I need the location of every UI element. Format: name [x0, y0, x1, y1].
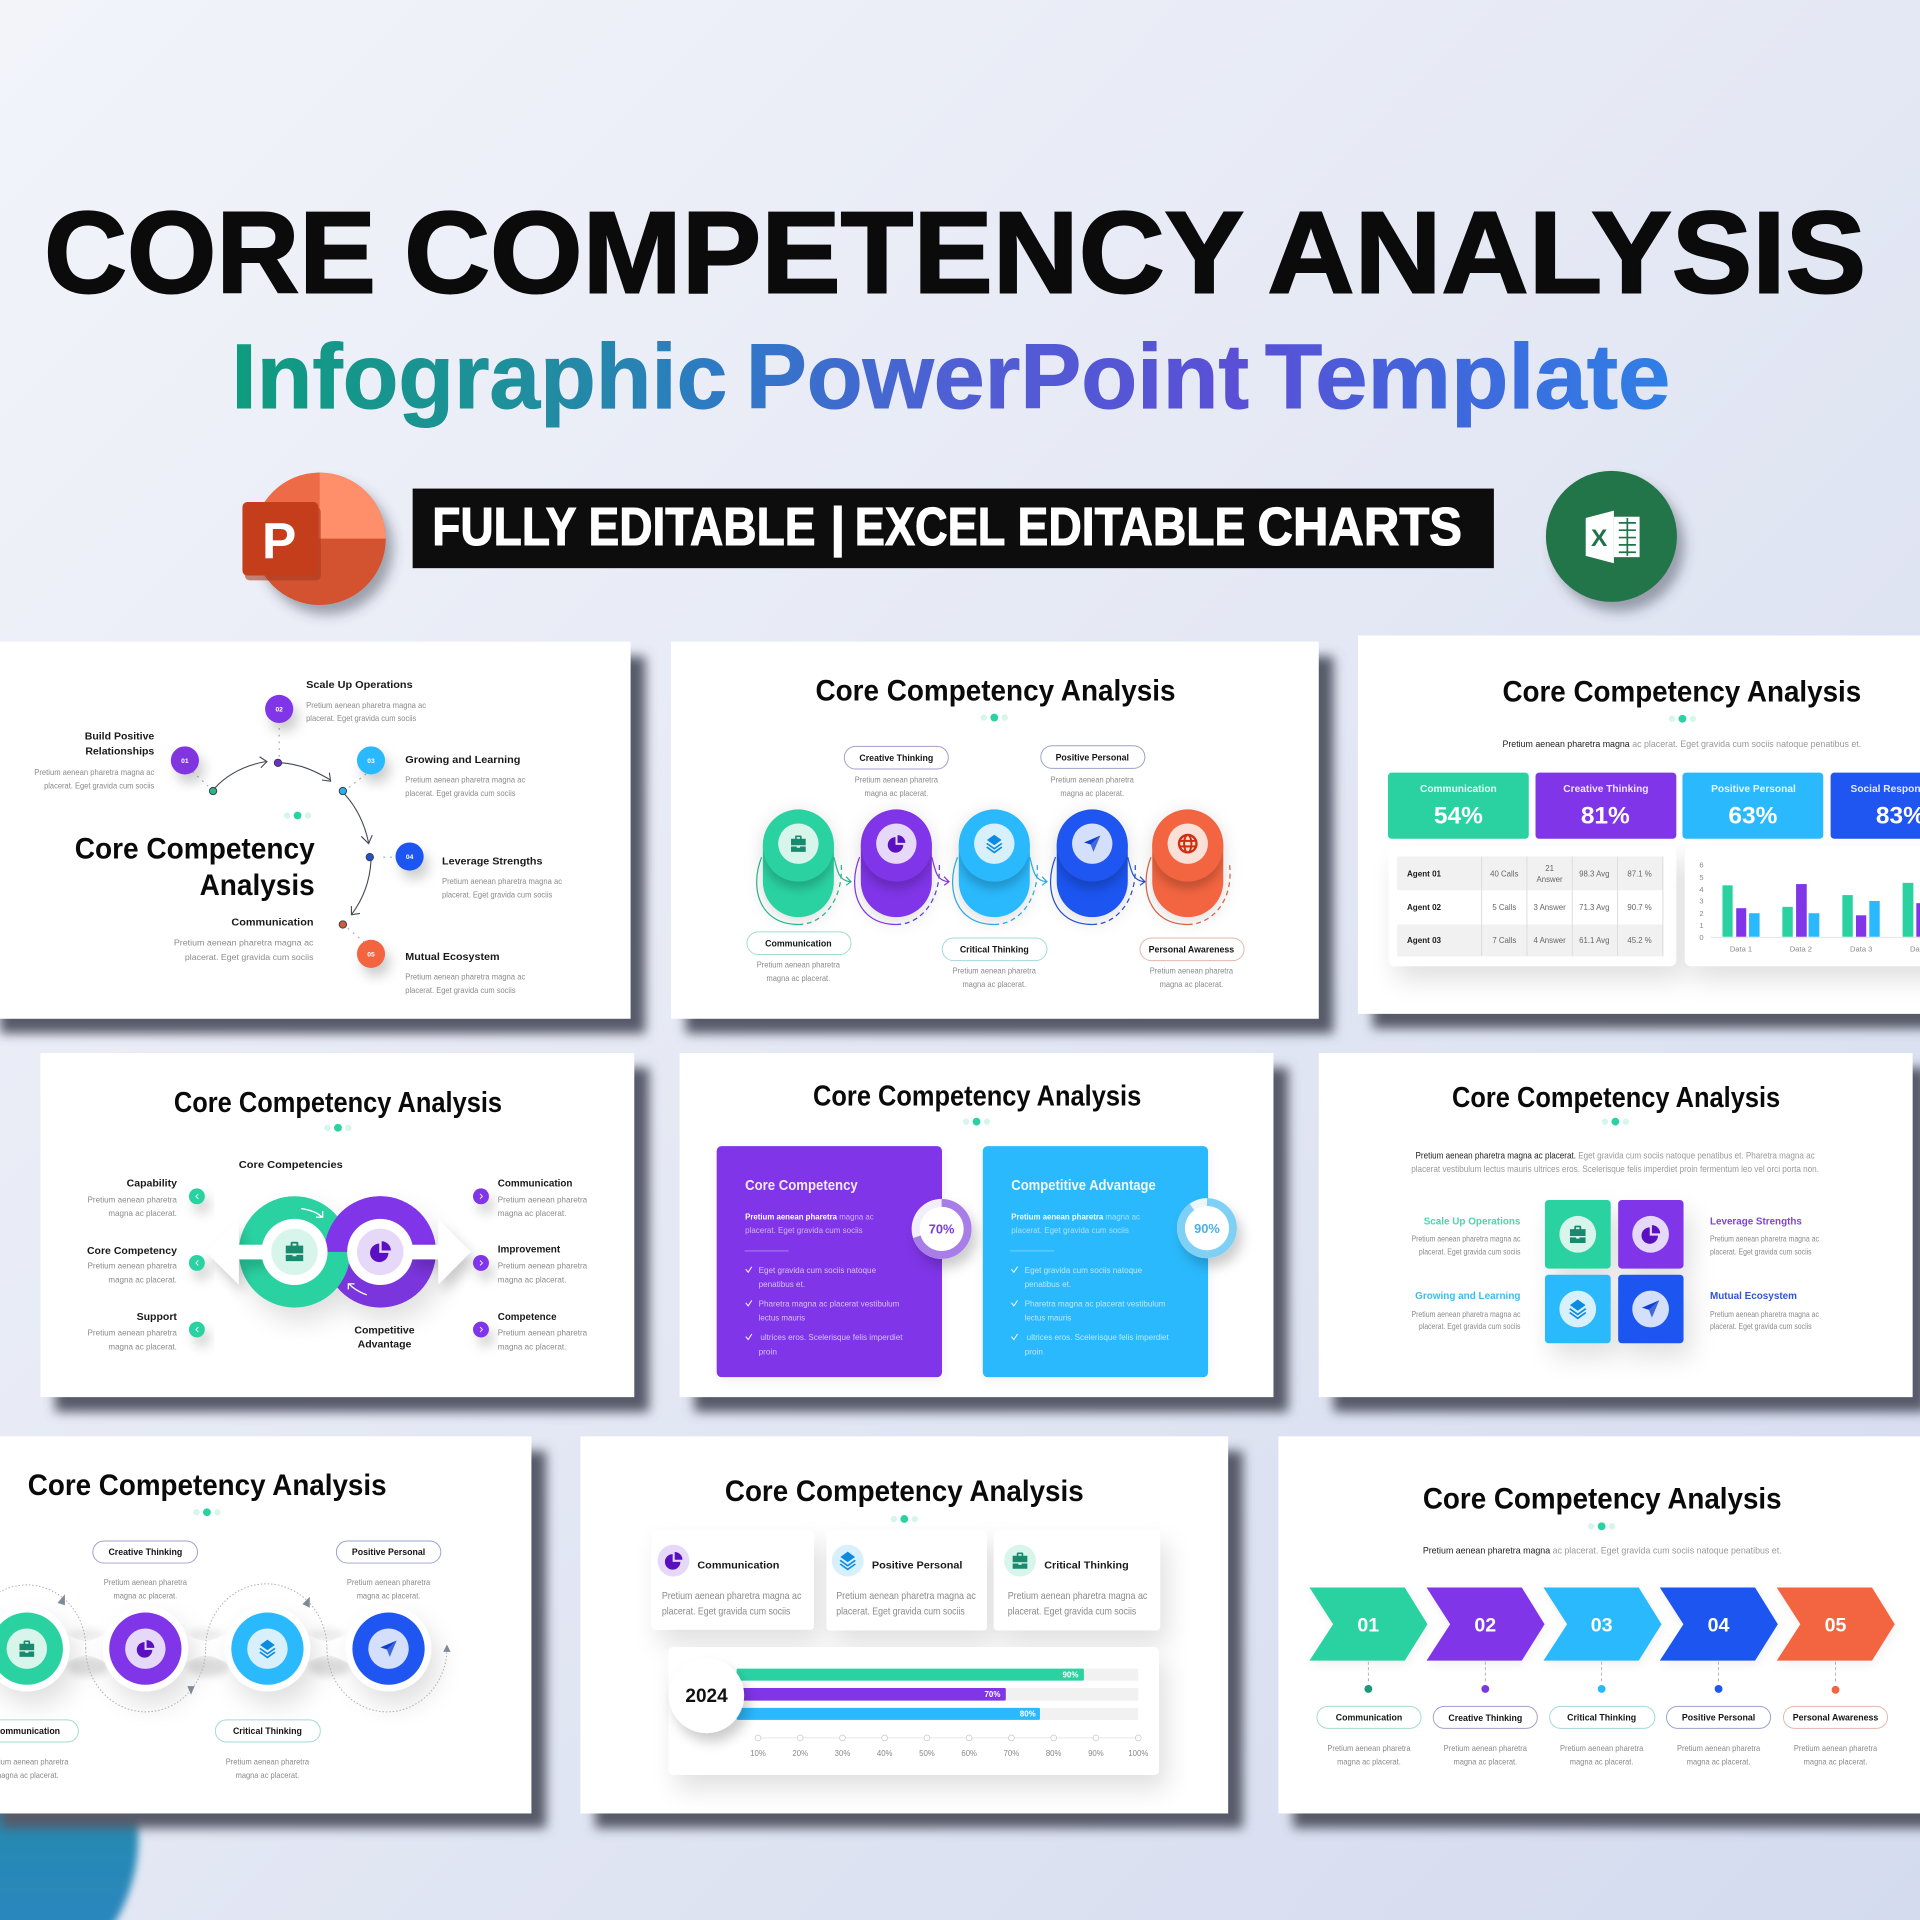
- banner: EDITABLE: [1018, 497, 1245, 557]
- slide 1 labels: placerat. Eget gravida cum sociis: [442, 890, 552, 900]
- progress panel: 70%: [1004, 1749, 1019, 1758]
- tile captions: Pretium aenean pharetra magna ac: [1411, 1234, 1521, 1244]
- slide 7 title: Core Competency Analysis: [28, 1469, 387, 1502]
- label competitive advantage: Competitive: [354, 1324, 415, 1336]
- donut 70%: 70%: [929, 1222, 955, 1237]
- data table: 71.3 Avg: [1579, 903, 1609, 912]
- slide 6 intro text: [1411, 1150, 1819, 1174]
- slide 3 subtitle: Pretium aenean pharetra magna ac placerat. Eget gravida cum sociis natoque penatibus et.: [1502, 739, 1861, 749]
- coloured circles with icons: [0, 1613, 425, 1685]
- info cards: placerat. Eget gravida cum sociis: [662, 1606, 790, 1617]
- purple card: [717, 1146, 942, 1377]
- pills: Communication: [1336, 1712, 1402, 1722]
- bar chart: Data 2: [1790, 944, 1812, 953]
- descriptions: Pretium aenean pharetra: [1560, 1743, 1643, 1753]
- descriptions: Pretium aenean pharetra: [1794, 1743, 1877, 1753]
- right column items: magna ac placerat.: [498, 1275, 566, 1285]
- small nodes: [209, 759, 373, 928]
- slide 9 title: Core Competency Analysis: [1423, 1483, 1782, 1516]
- banner: [413, 489, 1494, 568]
- main title: ANALYSIS: [1267, 188, 1866, 318]
- tile captions: Pretium aenean pharetra magna ac: [1411, 1309, 1521, 1319]
- slide 1 labels: Communication: [231, 917, 313, 929]
- data table: Agent 02: [1407, 903, 1442, 912]
- pill labels: Positive Personal: [1056, 752, 1129, 762]
- KPI cards: 63%: [1728, 802, 1778, 829]
- descriptions: magna ac placerat.: [1804, 1756, 1867, 1766]
- progress panel: 2024: [685, 1686, 728, 1707]
- data table: Agent 03: [1407, 936, 1442, 945]
- right column items: Communication: [498, 1178, 572, 1190]
- subtitle: PowerPoint: [746, 326, 1249, 428]
- descriptions: magna ac placerat.: [1687, 1756, 1750, 1766]
- data table: [1389, 846, 1676, 966]
- KPI cards: 81%: [1581, 802, 1630, 829]
- descriptions: magna ac placerat.: [767, 973, 830, 983]
- chevron arrows: [1309, 1588, 1895, 1661]
- tile captions: placerat. Eget gravida cum sociis: [1710, 1246, 1812, 1256]
- purple card: proin: [759, 1346, 777, 1356]
- pill labels: Creative Thinking: [859, 753, 933, 763]
- pills and descriptions: Creative Thinking: [108, 1547, 182, 1557]
- progress panel: 80%: [1020, 1710, 1036, 1719]
- pill labels: Personal Awareness: [1149, 945, 1234, 955]
- data table: 4 Answer: [1533, 936, 1566, 945]
- pills and descriptions: magna ac placerat.: [114, 1591, 177, 1601]
- descriptions: magna ac placerat.: [962, 979, 1026, 989]
- info cards: Communication: [697, 1560, 779, 1572]
- pills: Critical Thinking: [1567, 1712, 1636, 1722]
- icon tiles: [1545, 1200, 1684, 1343]
- bar chart: 1: [1699, 921, 1704, 930]
- sky card: placerat. Eget gravida cum sociis: [1011, 1225, 1129, 1235]
- slide 3 title: Core Competency Analysis: [1502, 676, 1861, 709]
- chevron arrows: 03: [1591, 1615, 1613, 1637]
- label competitive advantage: Advantage: [358, 1339, 412, 1351]
- info cards: Pretium aenean pharetra magna ac: [1008, 1591, 1147, 1602]
- slide 4 title: Core Competency Analysis: [174, 1087, 502, 1119]
- slide 6 title: Core Competency Analysis: [1452, 1082, 1780, 1114]
- tile captions: Mutual Ecosystem: [1710, 1291, 1797, 1302]
- main title: [44, 188, 1866, 318]
- pill labels: Critical Thinking: [960, 945, 1029, 955]
- data table: 90.7 %: [1627, 903, 1652, 912]
- pills: Creative Thinking: [1448, 1713, 1522, 1723]
- KPI cards: Creative Thinking: [1563, 784, 1649, 795]
- sky card: ultrices eros. Scelerisque felis imperdiet: [1027, 1332, 1169, 1342]
- right column items: Pretium aenean pharetra: [498, 1327, 587, 1337]
- sky card: Pretium aenean pharetra magna ac: [1011, 1212, 1141, 1222]
- info cards: Pretium aenean pharetra magna ac: [836, 1591, 976, 1602]
- left column items: Pretium aenean pharetra: [88, 1327, 177, 1337]
- slide 1 labels: Build Positive: [85, 731, 154, 743]
- subtitle: Infographic: [231, 326, 727, 428]
- panel: slide 1 radial steps: [0, 642, 645, 1033]
- progress panel: 50%: [919, 1749, 935, 1758]
- slide 1 title: Core Competency: [75, 832, 315, 865]
- sky card: Eget gravida cum sociis natoque: [1025, 1265, 1142, 1275]
- KPI cards: [1388, 773, 1920, 839]
- sky card: proin: [1025, 1346, 1043, 1356]
- left column items: Support: [137, 1311, 177, 1323]
- purple card: penatibus et.: [759, 1279, 805, 1289]
- progress panel: 60%: [961, 1749, 977, 1758]
- bar chart: 4: [1699, 885, 1704, 894]
- subtitle: Template: [1265, 326, 1670, 428]
- data table: Answer: [1537, 875, 1563, 884]
- purple card: placerat. Eget gravida cum sociis: [745, 1225, 863, 1235]
- slide 2 title: Core Competency Analysis: [816, 674, 1176, 707]
- right column items: Competence: [498, 1311, 557, 1323]
- slide 1 labels: placerat. Eget gravida cum sociis: [306, 713, 416, 723]
- left column items: Pretium aenean pharetra: [88, 1261, 177, 1271]
- donut 90%: [1177, 1198, 1237, 1258]
- right column items: [473, 1178, 587, 1351]
- slide 1 labels: Relationships: [85, 745, 154, 757]
- capsule green: [757, 809, 851, 924]
- numbered circles: 03: [367, 758, 375, 765]
- numbered circles: 01: [181, 758, 189, 765]
- data table: 98.3 Avg: [1579, 870, 1609, 879]
- purple card: Core Competency: [745, 1178, 858, 1194]
- slide 1 title: Analysis: [200, 869, 315, 902]
- pills: [1317, 1706, 1888, 1728]
- sky card: penatibus et.: [1025, 1279, 1071, 1289]
- left column items: magna ac placerat.: [108, 1208, 177, 1218]
- descriptions: [1327, 1743, 1877, 1766]
- slide 1 labels: placerat. Eget gravida cum sociis: [405, 985, 516, 995]
- panel: slide 5 comparison cards: [680, 1053, 1288, 1412]
- banner: EXCEL: [855, 497, 1005, 557]
- KPI cards: Communication: [1420, 784, 1497, 795]
- purple card: ultrices eros. Scelerisque felis imperdiet: [760, 1332, 903, 1342]
- descriptions: magna ac placerat.: [1060, 788, 1124, 798]
- pill labels: Communication: [765, 939, 832, 949]
- dotted arrows: [0, 1584, 447, 1712]
- chevron arrows: 01: [1357, 1615, 1379, 1637]
- data table: 7 Calls: [1492, 936, 1516, 945]
- left column items: [87, 1178, 205, 1351]
- left column items: Pretium aenean pharetra: [88, 1194, 177, 1204]
- right column items: magna ac placerat.: [498, 1208, 566, 1218]
- capsule purple: [855, 809, 949, 924]
- pills and descriptions: Pretium aenean pharetra: [226, 1756, 309, 1766]
- right column items: Improvement: [498, 1244, 561, 1256]
- tile captions: Pretium aenean pharetra magna ac: [1710, 1234, 1820, 1244]
- dashed stems and dots: [1364, 1662, 1839, 1694]
- slide 8 title: Core Competency Analysis: [725, 1475, 1084, 1508]
- data table: Agent 01: [1407, 870, 1442, 879]
- data table: 40 Calls: [1490, 870, 1519, 879]
- slide 1 labels: placerat. Eget gravida cum sociis: [185, 952, 313, 962]
- info cards: Pretium aenean pharetra magna ac: [662, 1591, 802, 1602]
- label competitive advantage: [354, 1324, 415, 1351]
- right column items: magna ac placerat.: [498, 1341, 566, 1351]
- banner: CHARTS: [1258, 497, 1462, 557]
- bar chart: 3: [1699, 897, 1704, 906]
- progress panel: 10%: [750, 1749, 766, 1758]
- data table: 45.2 %: [1627, 936, 1652, 945]
- slide 1 labels: placerat. Eget gravida cum sociis: [44, 781, 154, 791]
- decorative blue blob: [0, 1668, 138, 1920]
- data table: 5 Calls: [1492, 903, 1516, 912]
- KPI cards: Positive Personal: [1711, 784, 1796, 795]
- bar chart: [1685, 846, 1920, 966]
- tile captions: placerat. Eget gravida cum sociis: [1419, 1321, 1520, 1331]
- tile captions: Scale Up Operations: [1424, 1216, 1521, 1227]
- pill labels: [747, 746, 1244, 961]
- descriptions: Pretium aenean pharetra: [757, 959, 840, 969]
- descriptions: magna ac placerat.: [1453, 1756, 1517, 1766]
- descriptions: magna ac placerat.: [1337, 1756, 1401, 1766]
- slide 9 subtitle: Pretium aenean pharetra magna ac placerat. Eget gravida cum sociis natoque penatibus et.: [1423, 1545, 1782, 1555]
- banner: FULLY EDITABLE: [432, 497, 816, 557]
- purple card: Pretium aenean pharetra magna ac: [745, 1212, 874, 1222]
- numbered circles: 04: [406, 854, 414, 861]
- slide 6 intro text: placerat vestibulum lectus mauris ultrices eros. Scelerisque felis imperdiet proin fermentum leo vel orci porta non.: [1411, 1164, 1819, 1174]
- descriptions: magna ac placerat.: [864, 788, 928, 798]
- panel: slide 6 icon tiles: [1319, 1053, 1920, 1412]
- slide 1 labels: placerat. Eget gravida cum sociis: [405, 788, 516, 798]
- sky card: lectus mauris: [1025, 1313, 1071, 1323]
- descriptions: Pretium aenean pharetra: [855, 774, 938, 784]
- interlocking rings: [206, 1196, 471, 1308]
- slide 1 labels: Pretium aenean pharetra magna ac: [442, 876, 563, 886]
- descriptions: [757, 774, 1233, 989]
- sky card: Competitive Advantage: [1011, 1178, 1156, 1194]
- left column items: Capability: [127, 1178, 177, 1190]
- capsule blue: [1051, 809, 1145, 924]
- slide 1 labels: Pretium aenean pharetra magna ac: [405, 972, 526, 982]
- descriptions: Pretium aenean pharetra: [1051, 774, 1134, 784]
- purple card: lectus mauris: [759, 1313, 805, 1323]
- descriptions: Pretium aenean pharetra: [1327, 1743, 1411, 1753]
- heading core competencies: Core Competencies: [239, 1159, 343, 1171]
- info cards: Critical Thinking: [1044, 1560, 1129, 1572]
- info cards: [651, 1531, 1160, 1630]
- progress panel: 90%: [1088, 1749, 1104, 1758]
- pills and descriptions: Pretium aenean pharetra: [104, 1577, 187, 1587]
- donut 70%: [912, 1199, 972, 1259]
- progress panel: 30%: [835, 1749, 850, 1758]
- pills and descriptions: Pretium aenean pharetra: [347, 1577, 430, 1587]
- banner: |: [830, 497, 845, 558]
- capsule sky: [953, 809, 1047, 924]
- info cards: Positive Personal: [872, 1560, 963, 1572]
- slide 1 labels: Pretium aenean pharetra magna ac: [306, 700, 427, 710]
- left column items: magna ac placerat.: [108, 1341, 177, 1351]
- icon: PowerPoint logo: [242, 473, 386, 605]
- slide 1 labels: Mutual Ecosystem: [405, 951, 500, 963]
- bar chart: Data 1: [1730, 944, 1752, 953]
- purple card: Eget gravida cum sociis natoque: [759, 1265, 876, 1275]
- tile captions: Leverage Strengths: [1710, 1216, 1802, 1227]
- numbered circles: 02: [275, 706, 283, 713]
- numbered circles: 05: [367, 951, 375, 958]
- bar chart: 0: [1699, 933, 1704, 942]
- KPI cards: 54%: [1434, 802, 1483, 829]
- tile captions: Growing and Learning: [1415, 1291, 1520, 1302]
- slide 5 title: Core Competency Analysis: [813, 1081, 1141, 1113]
- panel: slide 8 cards and progress bars: [580, 1436, 1243, 1828]
- pills and descriptions: [0, 1541, 441, 1780]
- bar chart: 2: [1699, 909, 1704, 918]
- right column items: Pretium aenean pharetra: [498, 1194, 587, 1204]
- donut 90%: 90%: [1194, 1221, 1220, 1236]
- pills and descriptions: magna ac placerat.: [357, 1591, 420, 1601]
- subtitle: [231, 326, 1670, 428]
- icon: PowerPoint logo: P: [262, 511, 296, 569]
- slide 1 labels: Pretium aenean pharetra magna ac: [405, 774, 526, 784]
- bar chart: Data 3: [1850, 944, 1872, 953]
- right column items: Pretium aenean pharetra: [498, 1261, 587, 1271]
- chevron arrows: 02: [1474, 1615, 1496, 1637]
- left column items: Core Competency: [87, 1245, 177, 1257]
- progress panel: 40%: [877, 1749, 893, 1758]
- progress panel: [669, 1647, 1159, 1775]
- main title: COMPETENCY: [404, 188, 1244, 318]
- pills and descriptions: Critical Thinking: [233, 1726, 302, 1736]
- progress panel: 70%: [985, 1690, 1000, 1699]
- icon: Excel logo: [1546, 471, 1677, 602]
- slide 1 labels: [34, 679, 563, 995]
- chevron arrows: 05: [1825, 1615, 1847, 1637]
- tile captions: [1411, 1216, 1820, 1331]
- pills: Personal Awareness: [1793, 1712, 1878, 1722]
- panel: slide 3 KPI table and chart: [1358, 636, 1920, 1029]
- info cards: placerat. Eget gravida cum sociis: [1008, 1606, 1136, 1617]
- data table: 21: [1545, 864, 1554, 873]
- descriptions: Pretium aenean pharetra: [1150, 965, 1233, 975]
- descriptions: magna ac placerat.: [1160, 979, 1223, 989]
- left column items: magna ac placerat.: [108, 1275, 177, 1285]
- main title: CORE: [44, 188, 376, 318]
- descriptions: Pretium aenean pharetra: [1444, 1743, 1527, 1753]
- descriptions: magna ac placerat.: [1570, 1756, 1633, 1766]
- capsule orange: [1146, 809, 1230, 924]
- slide 6 intro text: Pretium aenean pharetra magna ac placerat. Eget gravida cum sociis natoque penatibus et. Pharetra magna ac: [1416, 1150, 1815, 1160]
- pills and descriptions: Positive Personal: [352, 1547, 425, 1557]
- slide 1 labels: Growing and Learning: [405, 754, 520, 766]
- progress panel: 80%: [1046, 1749, 1062, 1758]
- progress panel: 90%: [1063, 1671, 1078, 1680]
- progress panel: 100%: [1128, 1749, 1148, 1758]
- pills: Positive Personal: [1682, 1712, 1755, 1722]
- progress panel: 20%: [792, 1749, 808, 1758]
- tile captions: placerat. Eget gravida cum sociis: [1419, 1246, 1520, 1256]
- descriptions: Pretium aenean pharetra: [1677, 1743, 1760, 1753]
- numbered circles: [171, 695, 424, 968]
- slide 1 labels: Leverage Strengths: [442, 855, 543, 867]
- arrow heads: [58, 1594, 451, 1695]
- data table: 61.1 Avg: [1579, 936, 1609, 945]
- descriptions: Pretium aenean pharetra: [953, 965, 1036, 975]
- bar chart: 6: [1699, 861, 1704, 870]
- tile captions: Pretium aenean pharetra magna ac: [1710, 1309, 1820, 1319]
- icon: Excel logo: X: [1591, 525, 1608, 552]
- data table: 3 Answer: [1533, 903, 1566, 912]
- panel: slide 2 capsule steps: [671, 642, 1333, 1033]
- slide 1 labels: Pretium aenean pharetra magna ac: [174, 937, 314, 947]
- slide 1 labels: Pretium aenean pharetra magna ac: [34, 767, 155, 777]
- sky card: Pharetra magna ac placerat vestibulum: [1025, 1299, 1165, 1309]
- chevron arrows: 04: [1708, 1615, 1730, 1637]
- panel: slide 7 connected circles: [0, 1436, 546, 1828]
- info cards: placerat. Eget gravida cum sociis: [836, 1606, 965, 1617]
- panel: slide 9 chevron process: [1278, 1436, 1920, 1828]
- data table: 87.1 %: [1627, 870, 1652, 879]
- slide 1 title: [75, 832, 315, 902]
- bar chart: 5: [1699, 873, 1704, 882]
- tile captions: placerat. Eget gravida cum sociis: [1710, 1321, 1812, 1331]
- purple card: Pharetra magna ac placerat vestibulum: [759, 1299, 899, 1309]
- connector arrows: [192, 721, 397, 943]
- panel: slide 4 core competencies rings: [40, 1053, 649, 1412]
- pills and descriptions: magna ac placerat.: [236, 1770, 299, 1780]
- slide 1 labels: Scale Up Operations: [306, 679, 413, 691]
- sky card: [983, 1146, 1208, 1377]
- connectors and rings: [0, 1606, 431, 1692]
